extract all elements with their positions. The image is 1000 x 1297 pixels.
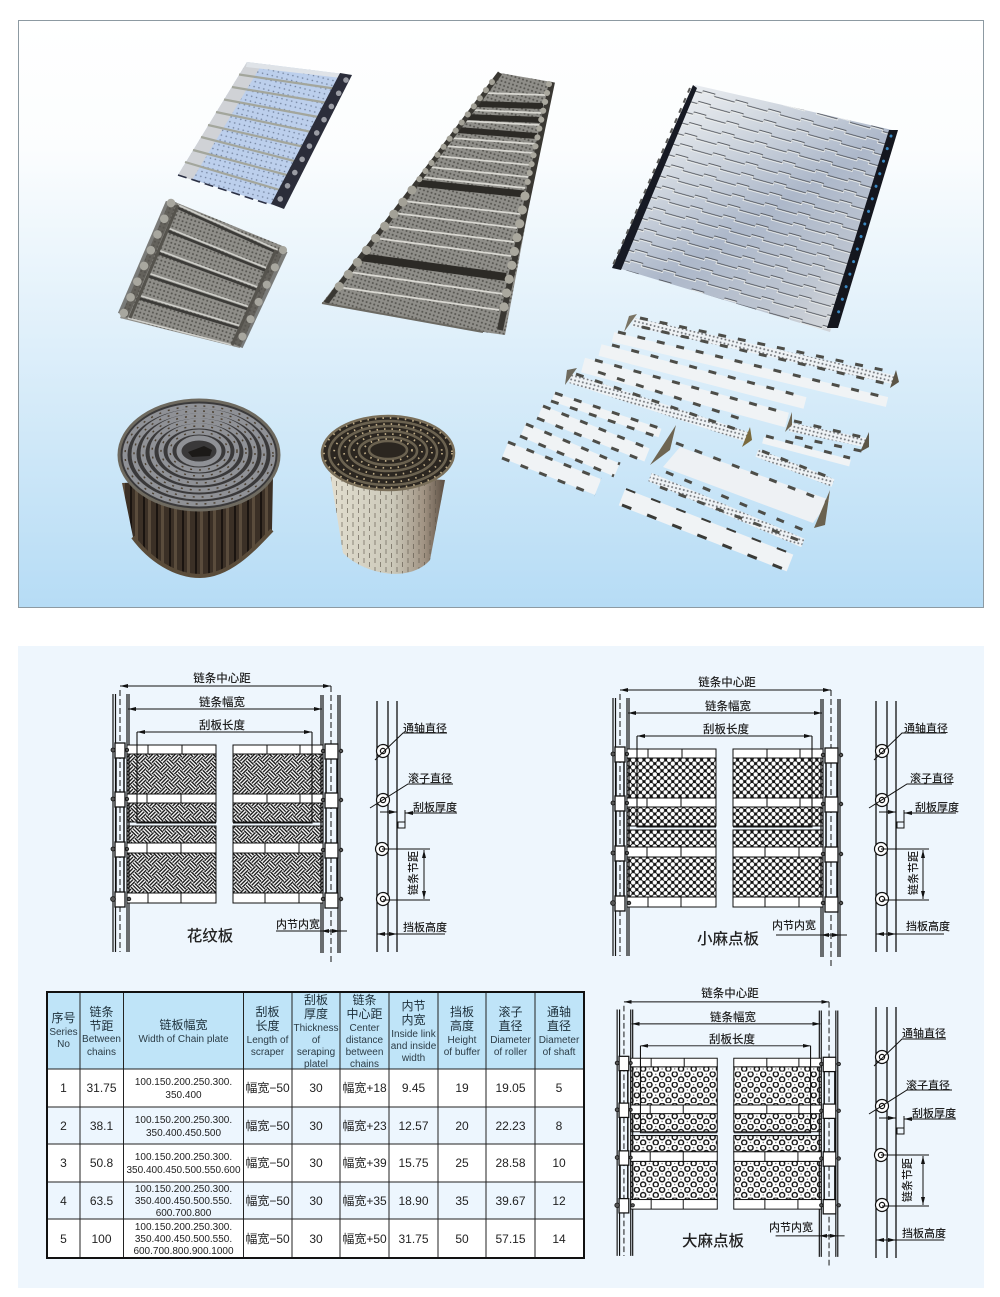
table row 1: 19 bbox=[455, 1081, 469, 1095]
table header row: between bbox=[346, 1047, 383, 1058]
table row 4: 18.90 bbox=[398, 1194, 429, 1208]
table row 5: 14 bbox=[552, 1232, 566, 1246]
table row 4: 63.5 bbox=[90, 1194, 114, 1208]
table header row: chains bbox=[350, 1059, 379, 1070]
table row 4: 350.400.450.500.550. bbox=[135, 1196, 232, 1207]
diagram: large dimple plate chain (大麻点板): 内节内宽 bbox=[769, 1220, 813, 1234]
table row 2: 20 bbox=[455, 1119, 469, 1133]
diagram: large dimple plate chain (大麻点板): 滚子直径 bbox=[906, 1078, 950, 1092]
diagram: large dimple plate chain (大麻点板): 刮板厚度 bbox=[912, 1106, 956, 1120]
table header row: of roller bbox=[494, 1047, 528, 1058]
table header row: 内节 bbox=[401, 999, 426, 1013]
diagram: patterned plate chain (花纹板): 链条节距 bbox=[406, 851, 420, 895]
table row 1: 30 bbox=[309, 1081, 323, 1095]
table row 2: 30 bbox=[309, 1119, 323, 1133]
table row 4: 幅宽+35 bbox=[342, 1193, 387, 1208]
diagram: small dimple plate chain (小麻点板): 刮板厚度 bbox=[915, 800, 959, 814]
table row 1: 31.75 bbox=[86, 1081, 117, 1095]
table header row: Diameter bbox=[539, 1035, 580, 1046]
table header row: of shaft bbox=[543, 1047, 576, 1058]
table row 1: 幅宽−50 bbox=[245, 1080, 290, 1095]
table row 5: 幅宽−50 bbox=[245, 1231, 290, 1246]
table row 4: 30 bbox=[309, 1194, 323, 1208]
table row 2: 8 bbox=[556, 1119, 563, 1133]
table header row: 链板幅宽 bbox=[159, 1017, 208, 1032]
table header row: Series bbox=[49, 1027, 78, 1038]
table header row: Between bbox=[82, 1034, 121, 1045]
table row 4: 幅宽−50 bbox=[245, 1193, 290, 1208]
table row 2 bbox=[60, 1115, 563, 1139]
table header row: of buffer bbox=[444, 1047, 481, 1058]
table header row: Height bbox=[448, 1035, 477, 1046]
table header row: Diameter bbox=[490, 1035, 531, 1046]
table row 3: 幅宽−50 bbox=[245, 1155, 290, 1170]
table header row: 高度 bbox=[450, 1018, 474, 1033]
table row 3: 350.400.450.500.550.600 bbox=[126, 1165, 241, 1176]
table header row: 直径 bbox=[547, 1019, 571, 1033]
diagram: small dimple plate chain (小麻点板): 挡板高度 bbox=[906, 919, 950, 933]
table header row: chains bbox=[87, 1047, 116, 1058]
photo: steel hole plate chain bbox=[120, 200, 285, 348]
table header row: 链条 bbox=[352, 992, 377, 1007]
table row 1: 350.400 bbox=[165, 1090, 202, 1101]
table row 3: 30 bbox=[309, 1156, 323, 1170]
table row 4: 4 bbox=[60, 1194, 67, 1208]
table row 5: 600.700.800.900.1000 bbox=[133, 1246, 234, 1257]
table row 3: 100.150.200.250.300. bbox=[135, 1152, 232, 1163]
table header row: width bbox=[401, 1053, 425, 1064]
table row 1: 5 bbox=[556, 1081, 563, 1095]
photo: disassembled chain plates bbox=[502, 314, 899, 570]
table row 5 bbox=[60, 1222, 566, 1257]
diagram: patterned plate chain (花纹板): 通轴直径 bbox=[403, 721, 447, 735]
diagram: patterned plate chain (花纹板) bbox=[111, 671, 457, 962]
table header row: 内宽 bbox=[401, 1012, 426, 1027]
photo: perforated blue chain plate bbox=[178, 62, 352, 209]
table header row: 滚子 bbox=[498, 1004, 523, 1019]
diagram: patterned plate chain (花纹板): 内节内宽 bbox=[276, 917, 320, 931]
table header row: 中心距 bbox=[346, 1006, 383, 1021]
table row 5: 幅宽+50 bbox=[342, 1231, 387, 1246]
table header row: 序号 bbox=[51, 1010, 76, 1025]
table header row: 直径 bbox=[498, 1019, 523, 1033]
diagram: patterned plate chain (花纹板): 链条幅宽 bbox=[199, 695, 245, 709]
diagram: large dimple plate chain (大麻点板): 挡板高度 bbox=[902, 1226, 946, 1240]
table row 3: 15.75 bbox=[398, 1156, 429, 1170]
table row 5: 31.75 bbox=[398, 1232, 429, 1246]
diagram: small dimple plate chain (小麻点板): 内节内宽 bbox=[772, 918, 816, 932]
table row 1: 19.05 bbox=[495, 1081, 526, 1095]
table row 4: 100.150.200.250.300. bbox=[135, 1184, 232, 1195]
table header row bbox=[49, 992, 580, 1070]
diagram: large dimple plate chain (大麻点板) bbox=[615, 986, 956, 1265]
table row 3 bbox=[60, 1152, 566, 1176]
table row 3: 幅宽+39 bbox=[342, 1155, 387, 1170]
table row 1 bbox=[60, 1077, 563, 1101]
diagram: small dimple plate chain (小麻点板): 通轴直径 bbox=[904, 721, 948, 735]
table header row: and inside bbox=[391, 1041, 437, 1052]
table row 1: 9.45 bbox=[402, 1081, 426, 1095]
table header row: 通轴 bbox=[547, 1004, 571, 1019]
diagram: small dimple plate chain (小麻点板): 链条中心距 bbox=[698, 675, 756, 689]
panel: technical drawings and specification table bbox=[18, 646, 984, 1288]
table header row: No bbox=[57, 1039, 70, 1050]
diagram: large dimple plate chain (大麻点板): 大麻点板 bbox=[682, 1232, 744, 1250]
table header row: 节距 bbox=[89, 1019, 114, 1033]
diagram: patterned plate chain (花纹板): 花纹板 bbox=[187, 927, 234, 945]
diagram: small dimple plate chain (小麻点板): 滚子直径 bbox=[910, 771, 954, 785]
table header row: platel bbox=[304, 1059, 328, 1070]
diagram: large dimple plate chain (大麻点板): 链条节距 bbox=[900, 1158, 914, 1202]
table row 1: 幅宽+18 bbox=[342, 1080, 387, 1095]
photo: silver rolled chain coil bbox=[322, 416, 454, 574]
table row 2: 12.57 bbox=[398, 1119, 429, 1133]
table row 2: 38.1 bbox=[90, 1119, 114, 1133]
table row 1: 100.150.200.250.300. bbox=[135, 1077, 232, 1088]
table header row: of bbox=[312, 1035, 320, 1046]
table header row: Center bbox=[349, 1023, 380, 1034]
table row 5: 350.400.450.500.550. bbox=[135, 1234, 232, 1245]
table row 4: 35 bbox=[455, 1194, 469, 1208]
table row 1: 1 bbox=[60, 1081, 67, 1095]
table header row: Inside link bbox=[391, 1029, 437, 1040]
diagram: patterned plate chain (花纹板): 刮板长度 bbox=[199, 718, 245, 732]
table row 3: 50.8 bbox=[90, 1156, 114, 1170]
table row 3: 10 bbox=[552, 1156, 566, 1170]
table row 4 bbox=[60, 1184, 566, 1219]
diagram: small dimple plate chain (小麻点板): 链条节距 bbox=[906, 851, 920, 895]
table header row: Length of bbox=[247, 1035, 289, 1046]
table row 2: 22.23 bbox=[495, 1119, 526, 1133]
diagram: patterned plate chain (花纹板): 滚子直径 bbox=[408, 771, 452, 785]
table row 4: 600.700.800 bbox=[156, 1208, 212, 1219]
table header row: 刮板 bbox=[304, 993, 328, 1007]
diagram: small dimple plate chain (小麻点板): 刮板长度 bbox=[703, 722, 749, 736]
photo: large silver slat conveyor bbox=[612, 85, 898, 332]
table header row: Width of Chain plate bbox=[138, 1034, 229, 1045]
table row 2: 幅宽+23 bbox=[342, 1118, 387, 1133]
table header row: 厚度 bbox=[304, 1006, 328, 1021]
table row 5: 30 bbox=[309, 1232, 323, 1246]
table row 4: 12 bbox=[552, 1194, 566, 1208]
table row 3: 28.58 bbox=[495, 1156, 526, 1170]
table row 5: 100.150.200.250.300. bbox=[135, 1222, 232, 1233]
table row 5: 50 bbox=[455, 1232, 469, 1246]
diagram: patterned plate chain (花纹板): 挡板高度 bbox=[403, 920, 447, 934]
diagram: patterned plate chain (花纹板): 刮板厚度 bbox=[413, 800, 457, 814]
table row 2: 100.150.200.250.300. bbox=[135, 1115, 232, 1126]
table header row: distance bbox=[346, 1035, 384, 1046]
diagram: patterned plate chain (花纹板): 链条中心距 bbox=[193, 671, 251, 685]
table header row: 刮板 bbox=[255, 1005, 280, 1019]
table row 5: 100 bbox=[91, 1232, 112, 1246]
table row 2: 350.400.450.500 bbox=[146, 1128, 221, 1139]
table row 5: 5 bbox=[60, 1232, 67, 1246]
table header row: 链条 bbox=[89, 1004, 114, 1019]
diagram: small dimple plate chain (小麻点板) bbox=[611, 675, 959, 966]
table row 3: 3 bbox=[60, 1156, 67, 1170]
table row 2: 2 bbox=[60, 1119, 67, 1133]
photo: long tapered scraper chain bbox=[322, 73, 552, 335]
table header row: Thickness bbox=[293, 1023, 339, 1034]
table header row: 长度 bbox=[255, 1018, 280, 1033]
diagram: large dimple plate chain (大麻点板): 刮板长度 bbox=[709, 1032, 755, 1046]
photo: dark rolled chain coil bbox=[119, 400, 279, 576]
table header row: 挡板 bbox=[450, 1005, 474, 1019]
table row 5: 57.15 bbox=[495, 1232, 526, 1246]
table row 3: 25 bbox=[455, 1156, 469, 1170]
table row 4: 39.67 bbox=[495, 1194, 526, 1208]
table header row: scraper bbox=[251, 1047, 285, 1058]
diagram: small dimple plate chain (小麻点板): 小麻点板 bbox=[697, 930, 759, 948]
specification table bbox=[47, 992, 584, 1258]
panel: product photos bbox=[18, 20, 984, 608]
diagram: large dimple plate chain (大麻点板): 链条中心距 bbox=[701, 986, 759, 1000]
diagram: small dimple plate chain (小麻点板): 链条幅宽 bbox=[705, 699, 751, 713]
diagram: large dimple plate chain (大麻点板): 链条幅宽 bbox=[710, 1010, 756, 1024]
diagram: large dimple plate chain (大麻点板): 通轴直径 bbox=[902, 1026, 946, 1040]
table header row: seraping bbox=[297, 1047, 335, 1058]
table row 2: 幅宽−50 bbox=[245, 1118, 290, 1133]
